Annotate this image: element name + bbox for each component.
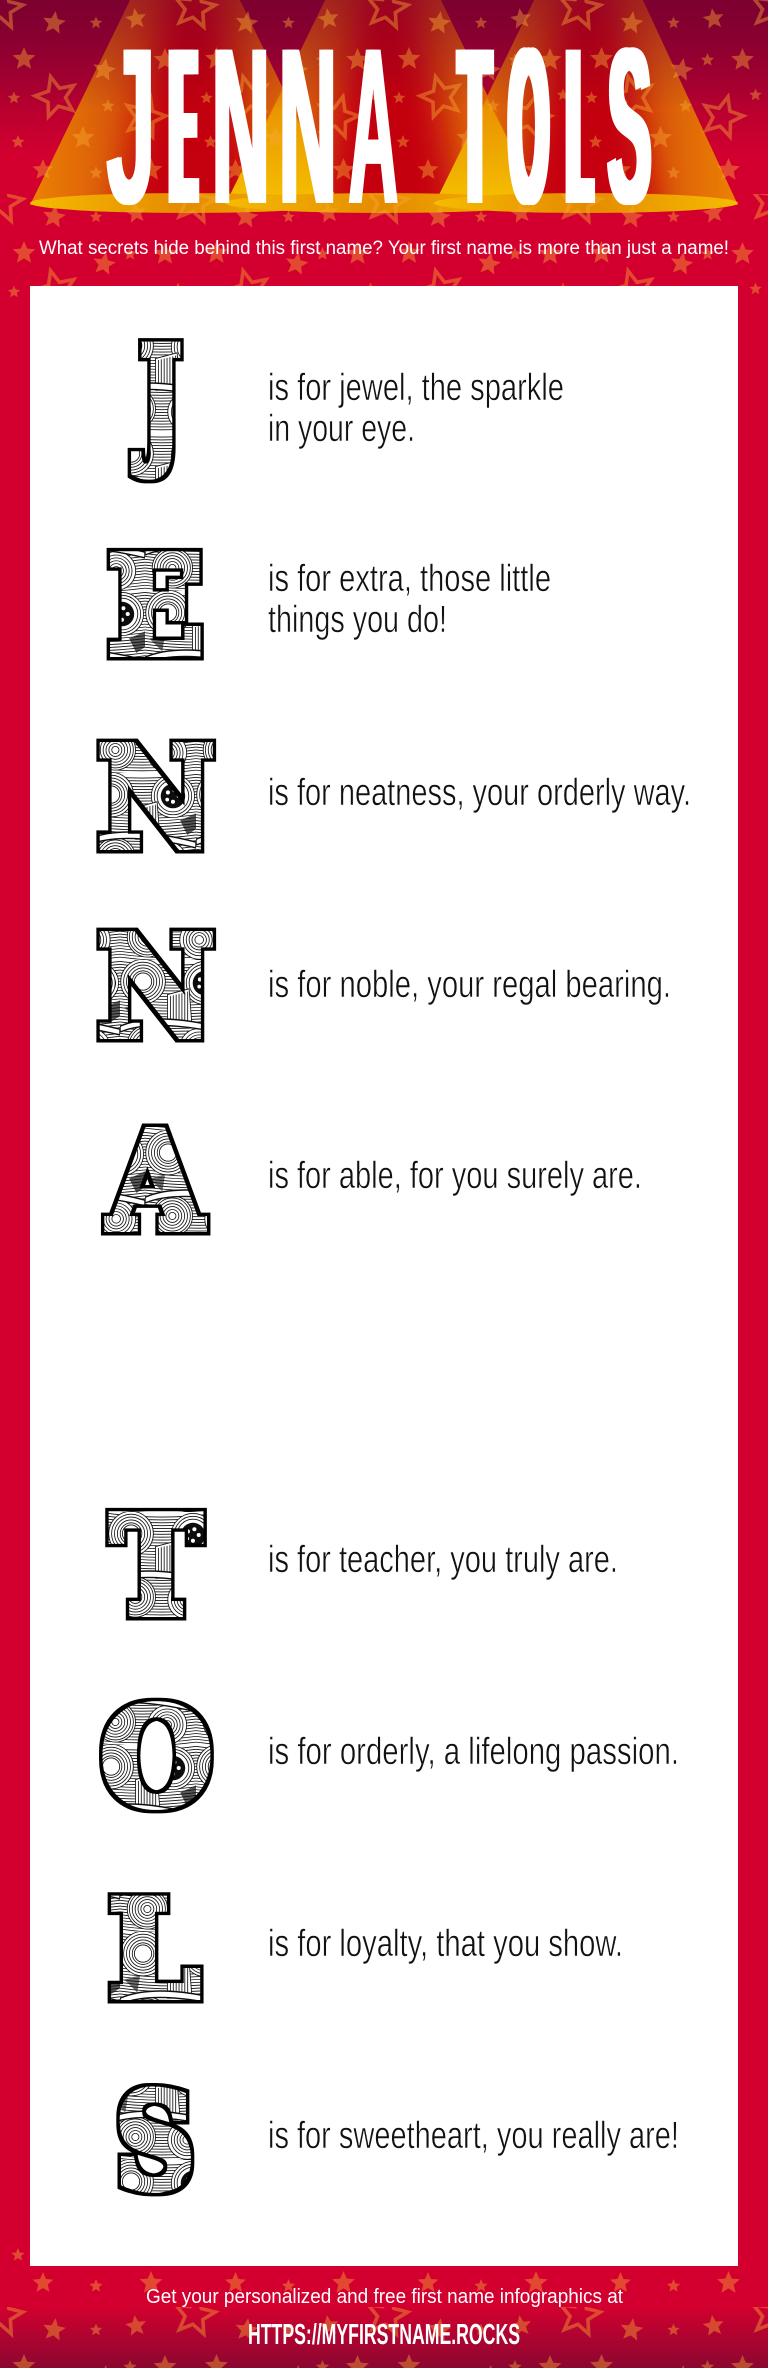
row: E — [108, 527, 551, 685]
title: J — [105, 2, 155, 251]
text: T line: is for teacher, you truly are. — [268, 1539, 618, 1581]
text: E line: things you do! — [268, 599, 447, 641]
row: A — [107, 1104, 642, 1260]
letter N: N — [98, 907, 214, 1068]
row: N — [98, 718, 691, 879]
row: O — [101, 1680, 679, 1836]
title: T — [455, 2, 487, 251]
white panel — [30, 286, 738, 2266]
footer text: Get your personalized and free first name infographics at — [146, 2286, 623, 2308]
footer url: HTTPS://MYFIRSTNAME.ROCKS — [248, 2319, 520, 2351]
spotlight floors — [30, 193, 738, 213]
spotlight top shade — [0, 0, 768, 110]
row: S — [116, 2065, 679, 2218]
letter E: E — [108, 527, 203, 685]
text: J line: in your eye. — [268, 408, 415, 450]
spotlights — [0, 0, 768, 225]
letter N: N — [98, 718, 214, 879]
letter S: S — [116, 2065, 194, 2218]
text: J line: is for jewel, the sparkle — [268, 367, 564, 409]
star pattern: bottom — [0, 2245, 768, 2368]
text: J line — [268, 367, 564, 450]
row: L — [109, 1873, 623, 2028]
spotlight: left — [30, 0, 300, 205]
row: N second — [98, 907, 671, 1068]
title: O — [505, 2, 545, 251]
title: E — [166, 2, 191, 251]
letter J: J — [133, 316, 181, 480]
letter O: O — [101, 1680, 212, 1836]
text: E line — [268, 558, 551, 641]
row: J — [133, 316, 564, 480]
star pattern: top — [0, 0, 768, 300]
title: N — [277, 2, 335, 251]
spotlight: right — [440, 0, 738, 205]
letter A: A — [107, 1104, 204, 1260]
title: A — [347, 2, 396, 251]
row: T — [111, 1487, 618, 1645]
letter T: T — [111, 1487, 201, 1645]
title: N — [210, 2, 268, 251]
text: A line: is for able, for you surely are. — [268, 1155, 642, 1197]
title: L — [563, 2, 587, 251]
letter L: L — [109, 1873, 199, 2028]
spotlight: middle — [230, 0, 507, 194]
title: S — [605, 2, 648, 251]
spotlight overlaps — [225, 90, 541, 205]
text: L line: is for loyalty, that you show. — [268, 1923, 623, 1965]
subtitle: What secrets hide behind this first name? Your first name is more than just a name! — [39, 238, 729, 259]
title — [105, 2, 652, 251]
text: E line: is for extra, those little — [268, 558, 551, 600]
